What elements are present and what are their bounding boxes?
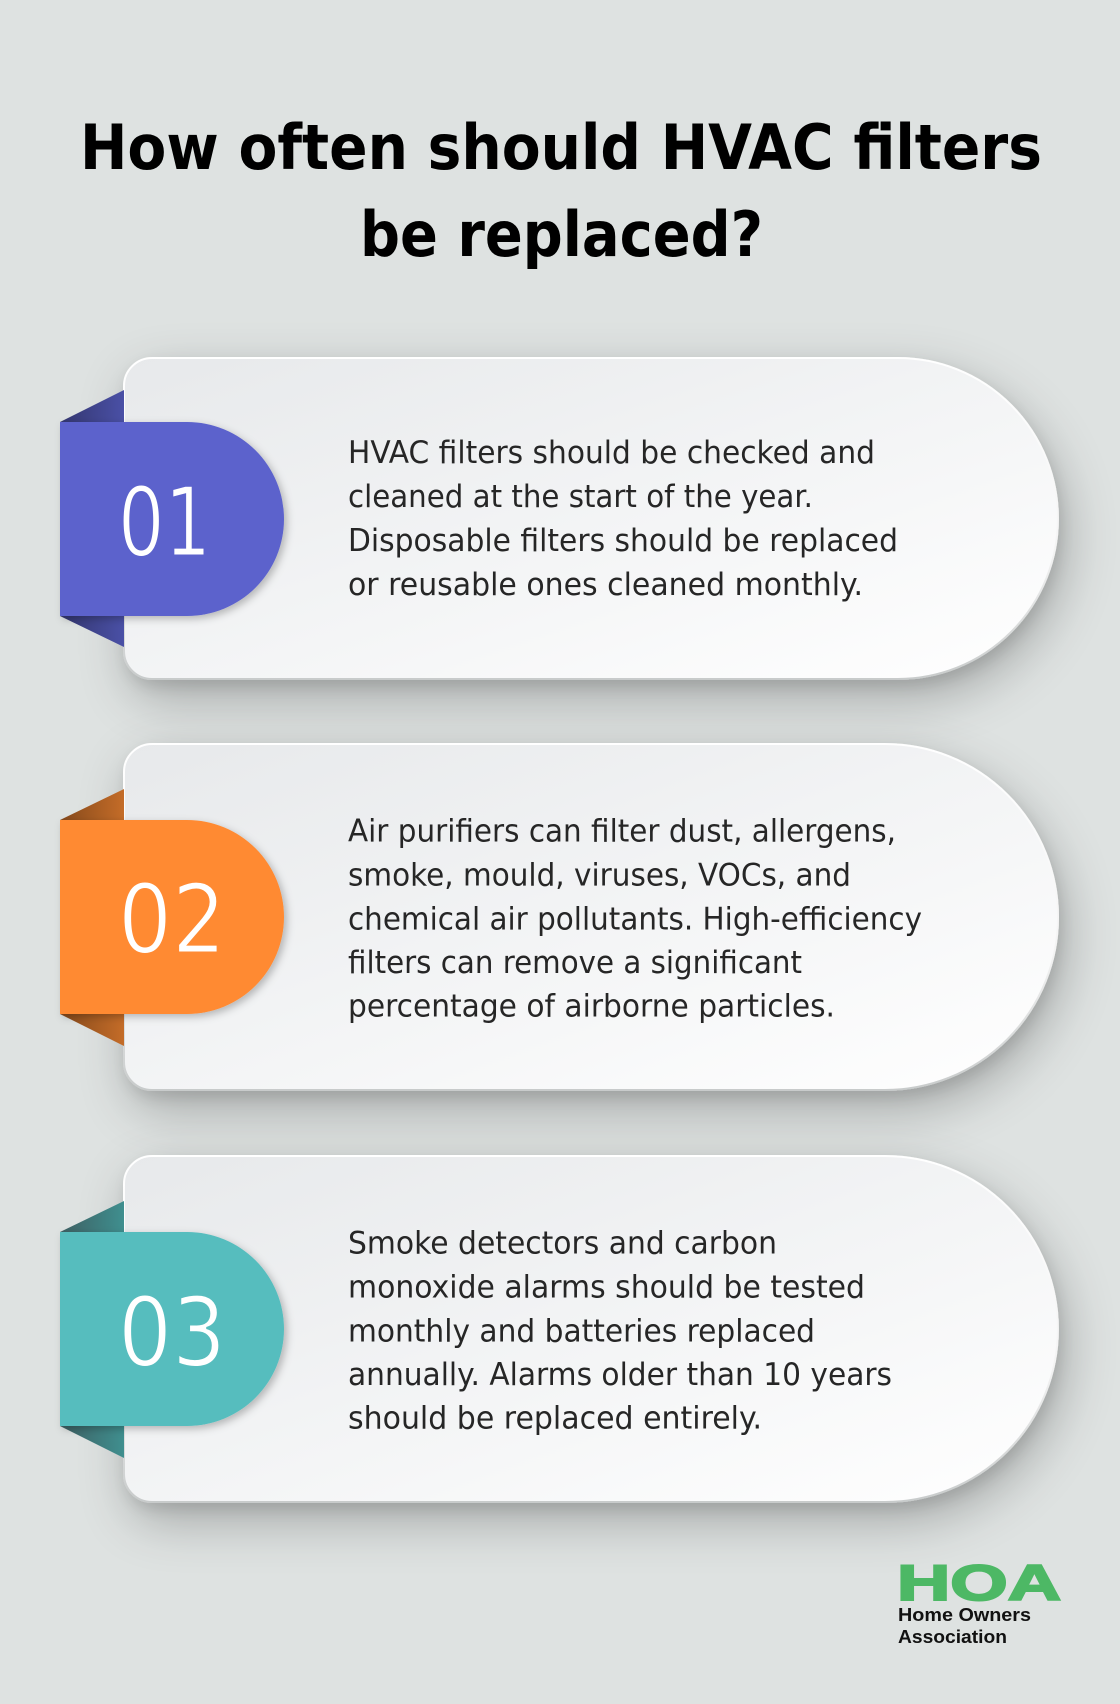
card 1 [124, 358, 1058, 679]
badge 2 [60, 820, 284, 1014]
title [80, 111, 1042, 271]
text 3: should be replaced entirely. [348, 1400, 762, 1436]
text 1: or reusable ones cleaned monthly. [348, 567, 863, 603]
text 1: cleaned at the start of the year. [348, 479, 813, 515]
ribbon folds 1 [60, 390, 124, 647]
number 01: 01 [118, 468, 211, 578]
badge 1 [60, 422, 284, 616]
text 3 [348, 1226, 892, 1436]
text 2: smoke, mould, viruses, VOCs, and [348, 858, 851, 894]
panel: step 2 [60, 744, 1058, 1090]
text 2: filters can remove a significant [348, 945, 802, 981]
title: How often should HVAC filters [80, 111, 1042, 184]
text 3: Smoke detectors and carbon [348, 1226, 777, 1262]
ribbon folds 3 [60, 1201, 124, 1458]
logo: HOA Home Owners Association: HOA [897, 1555, 1061, 1611]
text 2 [348, 814, 922, 1024]
number 03: 03 [118, 1278, 226, 1388]
text 2: Air purifiers can filter dust, allergens, [348, 814, 896, 850]
text 1: Disposable filters should be replaced [348, 523, 898, 559]
panel: step 3 [60, 1156, 1058, 1502]
text 1 [348, 435, 898, 603]
text 3: annually. Alarms older than 10 years [348, 1357, 892, 1393]
card 2 [124, 744, 1058, 1090]
text 3: monthly and batteries replaced [348, 1314, 815, 1350]
badge 3 [60, 1232, 284, 1426]
title: be replaced? [360, 198, 763, 271]
logo: HOA Home Owners Association: Home Owners [898, 1605, 1031, 1625]
logo: HOA Home Owners Association [897, 1555, 1061, 1647]
number 02: 02 [118, 866, 226, 976]
text 2: percentage of airborne particles. [348, 988, 835, 1024]
logo: HOA Home Owners Association: Association [898, 1627, 1007, 1647]
text 2: chemical air pollutants. High-efficiency [348, 902, 922, 938]
card 3 [124, 1156, 1058, 1502]
ribbon folds 2 [60, 789, 124, 1046]
text 1: HVAC filters should be checked and [348, 435, 875, 471]
text 3: monoxide alarms should be tested [348, 1270, 865, 1306]
panel: step 1 [60, 358, 1058, 679]
